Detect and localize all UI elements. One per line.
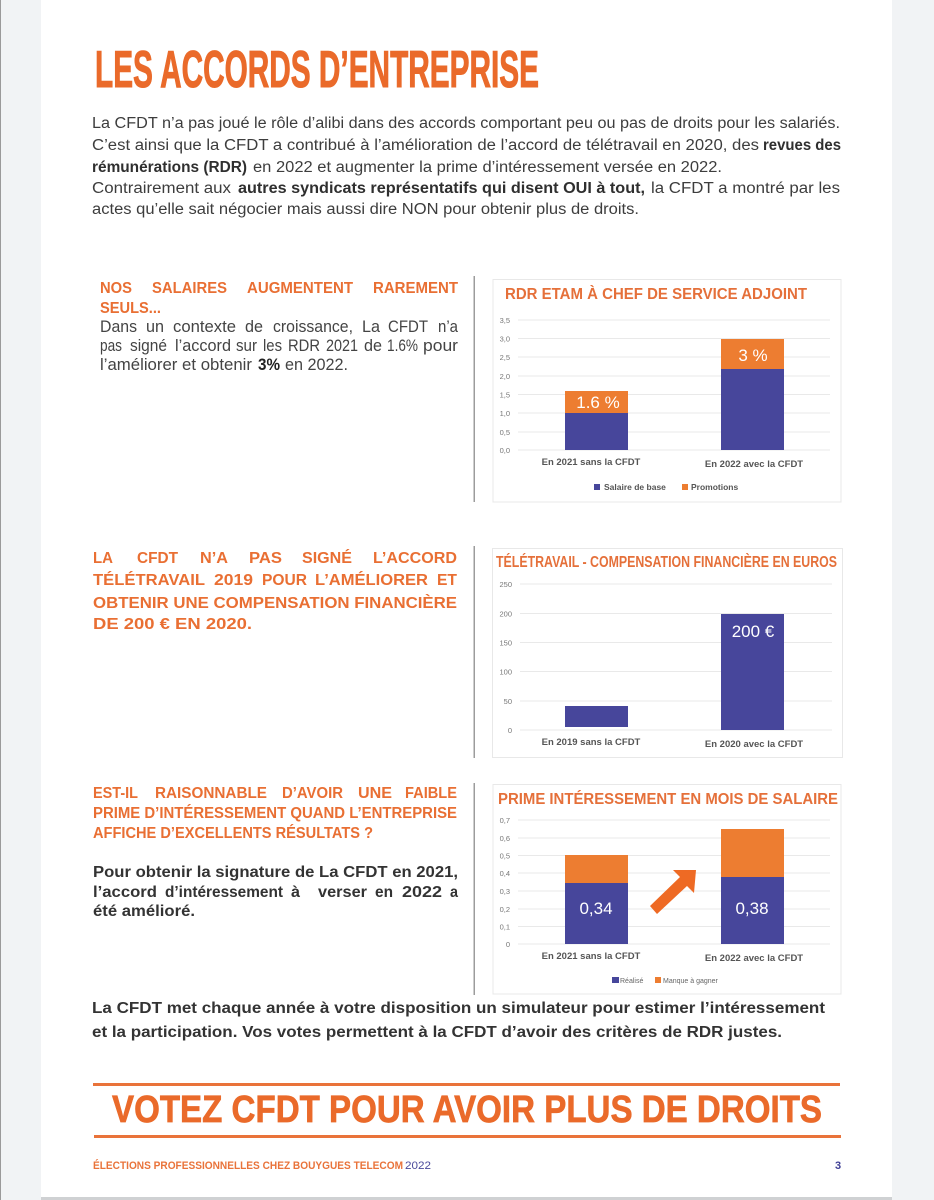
section 1 text: salaires: 3% [258,356,280,374]
category labels: RDR: En 2022 avec la CFDT [705,459,803,470]
section 3 text: intéressement: à [291,884,300,901]
section 1 text: salaires: 1.6% [387,337,418,355]
intro text block: Contrairement aux [92,180,231,197]
section 2 text: télétravail: CFDT [137,550,178,567]
closing paragraph: La CFDT met chaque année à votre disposition un simulateur pour estimer l’intéressement [92,1000,826,1017]
section 1 text: salaires: SALAIRES [152,280,227,297]
bar: 2021: 1.6 % [576,393,620,412]
legend: RDR [594,482,738,492]
y axis labels: RDR: 0,0 [500,446,510,455]
section divider 3 [474,783,475,995]
footer: 2022 [405,1160,431,1172]
bar: 2022 prime: 0,38 [735,899,769,918]
section 3 text: intéressement: PRIME D’INTÉRESSEMENT QUAND L’ENTREPRISE [93,803,457,822]
intro text block: C’est ainsi que la CFDT a contribué à l’amélioration de l’accord de télétravail en 2020, des [92,137,759,154]
section 3 text: intéressement: a [450,884,458,901]
category labels: RDR [542,457,803,470]
category labels: RDR: En 2021 sans la CFDT [542,457,641,468]
y axis labels: RDR: 0,5 [500,428,510,437]
section 3 text: intéressement: d’intéressement [165,884,284,901]
section 2 text: télétravail: OBTENIR UNE COMPENSATION FINANCIÈRE [93,593,457,612]
bar: 2020 [721,614,784,730]
section 1 text: salaires: signé [130,337,167,355]
y axis labels: télétravail: 50 [504,697,512,706]
section 1 text: salaires: 2021 [326,337,358,355]
y axis labels: prime [500,816,510,949]
y axis labels: RDR: 2,0 [500,372,510,381]
y axis labels: télétravail: 150 [499,638,512,648]
y axis labels: télétravail: 250 [499,580,512,589]
call to action banner [93,1083,841,1138]
y axis labels: prime: 0,7 [500,816,510,825]
section 1 text: salaires: croissance, [273,318,353,336]
arrow [650,870,696,914]
section 1 text: salaires: de [245,318,263,336]
section 2 text: télétravail: ET [437,572,457,589]
y axis labels: prime: 0,1 [500,922,510,932]
category labels: prime: En 2021 sans la CFDT [542,951,641,962]
section 2 text: télétravail: 2019 [214,572,253,589]
section 3 text: intéressement: D’AVOIR [282,785,343,802]
section 3 text: intéressement [93,785,458,920]
y axis labels: RDR: 1,5 [500,390,510,400]
section 3 text: intéressement: EST-IL [93,785,138,802]
y axis labels: RDR: 3,0 [500,334,510,344]
bar: 2022 prime [721,829,784,944]
closing paragraph: et la participation. Vos votes permettent à la CFDT d’avoir des critères de RDR justes. [92,1024,782,1041]
panel: RDR chart [493,280,841,502]
footer: 3 [835,1160,841,1172]
section 3 text: intéressement: UNE [358,785,392,802]
section 3 text: intéressement: été amélioré. [93,903,195,920]
intro text block: actes qu’elle sait négocier mais aussi dire NON pour obtenir plus de droits. [92,201,639,218]
section 1 text: salaires: NOS [100,280,132,297]
section 1 text: salaires: RDR [288,337,320,355]
section 3 text: intéressement: AFFICHE D’EXCELLENTS RÉSULTATS ? [93,823,373,842]
y axis labels: RDR: 3,5 [500,316,510,325]
section 2 text: télétravail: SIGNÉ [302,548,352,567]
bar: 2022 [721,339,784,450]
section 2 text: télétravail: PAS [249,550,282,567]
chart title: prime: PRIME INTÉRESSEMENT EN MOIS DE SALAIRE [498,789,838,808]
y axis labels: télétravail: 100 [499,668,512,676]
section 1 text: salaires: de [364,337,382,355]
legend: RDR: Salaire de base [604,482,666,492]
intro text block: autres syndicats représentatifs qui disent OUI à tout, [238,180,645,197]
y axis labels: télétravail: 0 [508,726,512,735]
section 1 text: salaires: pour [423,337,459,355]
section 1 text: salaires: l’améliorer et obtenir [100,356,253,374]
y axis labels: prime: 0,6 [500,834,510,843]
section 2 text: télétravail: LA [93,550,113,567]
section 3 text: intéressement: en [375,884,393,901]
y axis labels: prime: 0 [506,940,510,949]
section 1 text: salaires: un [146,318,164,336]
bar: 2021 prime: 0,34 [579,899,613,918]
section 2 text: télétravail [93,548,457,633]
section 1 text: salaires: n’a [438,318,459,336]
section 1 text: salaires: RAREMENT [373,280,458,297]
section 2 text: télétravail: POUR [262,572,307,589]
section divider 2 [474,546,475,758]
bar: 2019 [565,706,628,727]
chart title: RDR: RDR ETAM À CHEF DE SERVICE ADJOINT [505,284,807,303]
section 2 text: télétravail: L’ACCORD [373,550,457,567]
section 1 text: salaires: sur [236,337,257,355]
bar: 2020: 200 € [732,622,775,641]
y axis labels: prime: 0,2 [500,905,510,914]
section 1 text: salaires: Dans [100,318,137,336]
intro text block: rémunérations (RDR) [92,159,247,176]
category labels: télétravail: En 2019 sans la CFDT [542,737,641,748]
legend: prime: Réalisé [620,978,643,985]
section 3 text: intéressement: RAISONNABLE [155,785,267,802]
category labels: prime: En 2022 avec la CFDT [705,953,803,964]
legend: prime: Manque à gagner [663,978,719,985]
footer: ÉLECTIONS PROFESSIONNELLES CHEZ BOUYGUES TELECOM [93,1159,403,1172]
section 3 text: intéressement: FAIBLE [405,785,457,802]
section 3 text: intéressement: 2022 [402,884,442,901]
title: LES ACCORDS D’ENTREPRISE [95,41,539,99]
section 1 text: salaires: l’accord [175,337,231,355]
y axis labels: RDR: 1,0 [500,409,510,418]
call to action banner: VOTEZ CFDT POUR AVOIR PLUS DE DROITS [112,1089,822,1131]
section 1 text: salaires [100,280,459,374]
section 2 text: télétravail: N’A [200,550,228,567]
intro text block [92,115,841,218]
section 3 text: intéressement: Pour obtenir la signature de La CFDT en 2021, [93,864,458,881]
category labels: prime [542,951,803,964]
section 3 text: intéressement: l’accord [93,884,157,901]
category labels: télétravail [542,737,803,750]
y axis labels: télétravail [499,580,512,735]
y axis labels: prime: 0,4 [500,869,510,878]
section 2 text: télétravail: DE 200 € EN 2020. [93,616,252,633]
section 1 text: salaires: pas [100,337,122,355]
intro text block: revues des [763,137,841,154]
chart title: télétravail: TÉLÉTRAVAIL - COMPENSATION FINANCIÈRE EN EUROS [496,552,837,571]
section 1 text: salaires: les [263,337,282,355]
legend: RDR: Promotions [691,482,738,492]
intro text block: La CFDT n’a pas joué le rôle d’alibi dans des accords comportant peu ou pas de droits pour les salariés. [92,115,840,132]
bar: 2022: 3 % [738,346,768,365]
section 1 text: salaires: en 2022. [285,356,348,374]
y axis labels: télétravail: 200 [499,610,512,618]
bar: 2021 prime [565,855,628,944]
panel: télétravail chart [492,548,842,758]
section 1 text: salaires: AUGMENTENT [247,280,353,297]
section 2 text: télétravail: TÉLÉTRAVAIL [93,570,205,589]
section 2 text: télétravail: L’AMÉLIORER [315,570,428,589]
legend: prime [612,977,719,985]
y axis labels: prime: 0,5 [500,852,510,860]
closing paragraph [92,1000,826,1041]
section 1 text: salaires: La [362,318,381,336]
y axis labels: RDR: 2,5 [500,353,510,362]
footer [93,1159,841,1172]
y axis labels: prime: 0,3 [500,887,510,896]
bar: 2021 [565,391,628,450]
panel: prime chart [493,784,841,994]
section 3 text: intéressement: verser [318,884,367,901]
category labels: télétravail: En 2020 avec la CFDT [705,739,803,750]
section 1 text: salaires: CFDT [388,318,428,336]
section 1 text: salaires: SEULS... [100,300,161,317]
section divider 1 [474,276,475,502]
intro text block: en 2022 et augmenter la prime d’intéressement versée en 2022. [253,159,722,176]
y axis labels: RDR [500,316,510,455]
intro text block: la CFDT a montré par les [651,180,840,197]
section 1 text: salaires: contexte [173,318,236,336]
